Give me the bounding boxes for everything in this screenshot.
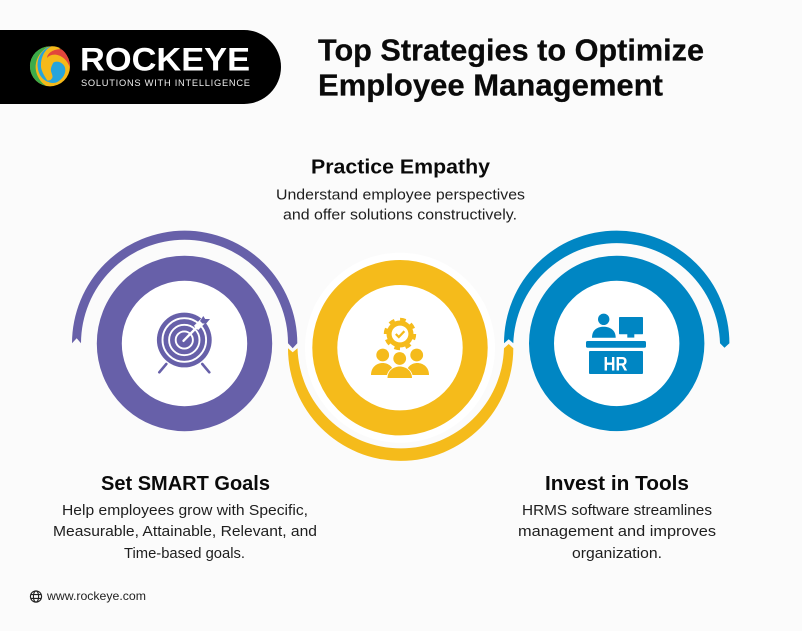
text block: smart goals description [53,503,317,562]
arc: yellow [288,344,513,461]
text block: practice empathy description: Understand employee perspectives [276,187,525,203]
heading: set smart goals: Set SMART Goals [101,473,270,495]
panel: invest in tools text [518,473,716,562]
icon: team with gear [371,319,429,378]
panel: practice empathy graphic [288,253,513,461]
icon: HR desk [586,314,646,375]
logo wordmark: ROCKEYE [80,42,250,78]
arc: purple [72,231,297,348]
icon: HR desk: HR [604,354,628,375]
ring: purple [109,268,260,419]
text block: invest in tools description: management and improves [518,524,716,540]
text block: invest in tools description: organization. [572,546,662,562]
text block: invest in tools description: HRMS software streamlines [522,503,712,519]
title: Top Strategies to Optimize [318,33,704,67]
text block: practice empathy description: and offer solutions constructively. [283,208,517,224]
text block: practice empathy description [276,187,525,224]
panel: set smart goals text [53,473,317,562]
icon: globe [30,591,42,602]
icon: swirl logo [30,46,70,86]
website address: www.rockeye.com [46,589,146,603]
panel: invest in tools graphic [504,231,729,419]
arc: blue [504,231,729,348]
logo tagline: SOLUTIONS WITH INTELLIGENCE [81,78,250,88]
text block: smart goals description: Time-based goals. [124,546,245,562]
text block: invest in tools description [518,503,716,562]
icon: target with arrow [157,312,212,372]
footer website [30,589,146,603]
title [318,33,704,102]
header logo badge [0,30,281,104]
text block: smart goals description: Help employees grow with Specific, [62,503,308,519]
panel: smart goals graphic [72,231,297,419]
title: Employee Management [318,68,663,102]
heading: practice empathy: Practice Empathy [311,156,491,178]
ring: yellow [325,272,475,423]
halo: white [305,253,495,443]
heading: invest in tools: Invest in Tools [545,473,689,495]
text block: smart goals description: Measurable, Attainable, Relevant, and [53,524,317,540]
ring: blue [542,268,692,419]
panel: practice empathy text [276,156,525,224]
